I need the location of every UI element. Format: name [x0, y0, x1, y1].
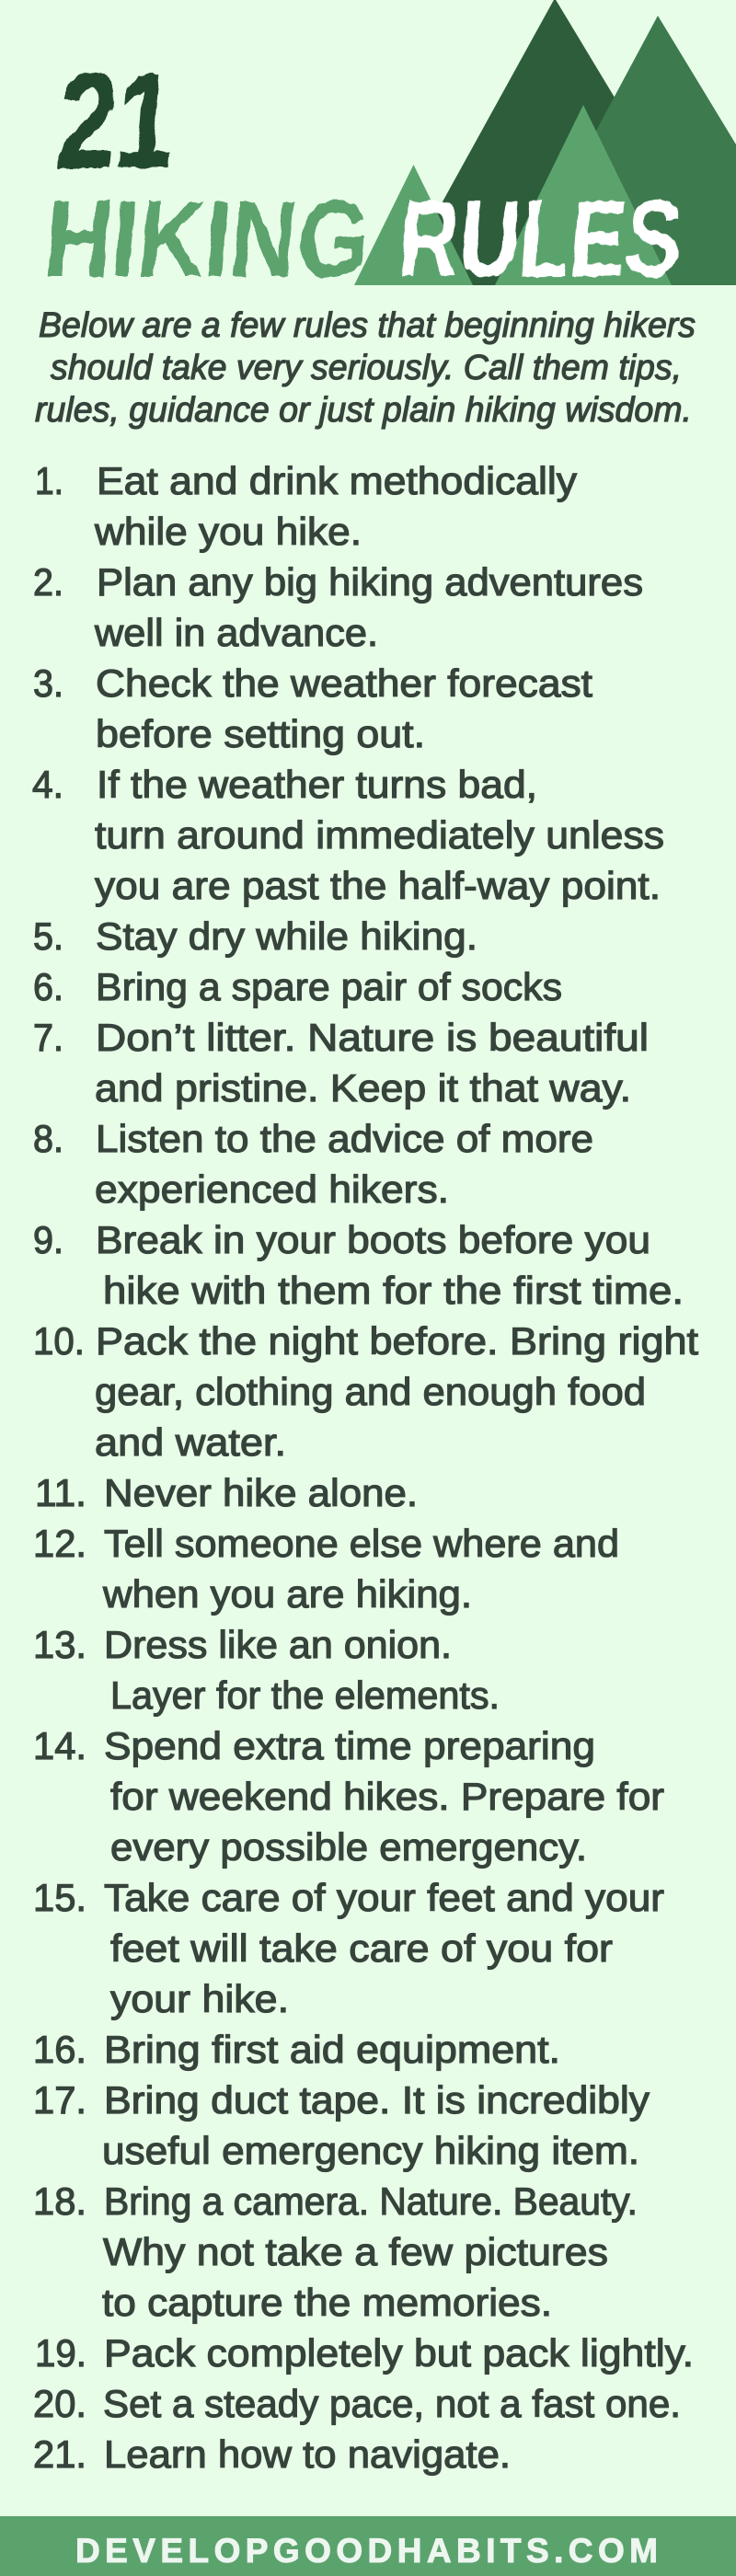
title — [40, 45, 686, 300]
rule 2: Plan any big hiking adventures — [97, 560, 643, 604]
rule 17: 17. — [33, 2078, 86, 2122]
rule 9: Break in your boots before you — [96, 1218, 650, 1261]
intro text: rules, guidance or just plain hiking wisdom. — [35, 391, 692, 430]
rule 13: 13. — [33, 1623, 86, 1666]
rule 6: Bring a spare pair of socks — [96, 965, 562, 1008]
rule 14: 14. — [33, 1724, 86, 1767]
rule 14: Spend extra time preparing — [104, 1724, 595, 1767]
rule 21: 21. — [33, 2432, 86, 2476]
intro text — [35, 306, 696, 430]
rule 7 — [33, 1016, 649, 1110]
rule 4: If the weather turns bad, — [97, 763, 537, 806]
rule 21: Learn how to navigate. — [104, 2432, 511, 2476]
rule 12 — [33, 1522, 619, 1616]
rule 14: every possible emergency. — [110, 1825, 587, 1869]
rule 4 — [32, 763, 664, 907]
rule 8: Listen to the advice of more — [96, 1117, 593, 1160]
rule 18: Bring a camera. Nature. Beauty. — [104, 2179, 638, 2223]
rule 17 — [33, 2078, 650, 2172]
rule 7: 7. — [33, 1016, 63, 1059]
rule 9: hike with them for the first time. — [103, 1269, 684, 1312]
rule 17: Bring duct tape. It is incredibly — [104, 2078, 650, 2122]
rule 3: Check the weather forecast — [96, 661, 592, 705]
rule 3: before setting out. — [96, 712, 425, 755]
rule 15: your hike. — [110, 1977, 289, 2020]
rule 9: 9. — [33, 1218, 63, 1261]
rule 7: Don’t litter. Nature is beautiful — [96, 1016, 649, 1059]
rule 12: when you are hiking. — [102, 1572, 472, 1616]
rule 4: turn around immediately unless — [95, 813, 664, 857]
rule 13: Dress like an onion. — [104, 1623, 452, 1666]
rule 18: 18. — [33, 2179, 86, 2223]
rule 1: while you hike. — [94, 510, 362, 553]
title number: 21: 21 — [52, 45, 181, 195]
rule 9 — [33, 1218, 684, 1312]
rule 3: 3. — [33, 661, 63, 705]
rule 11: Never hike alone. — [104, 1471, 418, 1514]
footer website text: DEVELOPGOODHABITS.COM — [75, 2532, 658, 2570]
rules list — [32, 459, 698, 2476]
rule 2 — [33, 560, 643, 654]
rule 19: 19. — [35, 2331, 86, 2375]
rule 10 — [33, 1319, 698, 1464]
rule 2: 2. — [33, 560, 63, 604]
intro text: should take very seriously. Call them tips, — [51, 349, 682, 387]
rule 11: 11. — [35, 1471, 86, 1514]
rule 16: Bring first aid equipment. — [104, 2028, 560, 2071]
rule 12: 12. — [33, 1522, 86, 1565]
rule 16: 16. — [33, 2028, 86, 2071]
rule 15: 15. — [33, 1876, 86, 1919]
rule 10: 10. — [33, 1319, 85, 1363]
rule 12: Tell someone else where and — [104, 1522, 619, 1565]
rule 18: to capture the memories. — [102, 2281, 552, 2324]
rule 5: Stay dry while hiking. — [96, 914, 477, 958]
title word: HIKING: HIKING — [40, 178, 374, 300]
rule 14 — [33, 1724, 664, 1869]
rule 4: 4. — [32, 763, 63, 806]
intro text: Below are a few rules that beginning hikers — [39, 306, 696, 345]
rule 17: useful emergency hiking item. — [102, 2129, 639, 2172]
rule 18 — [33, 2179, 638, 2324]
rule 15: feet will take care of you for — [110, 1926, 613, 1970]
rule 8: 8. — [33, 1117, 63, 1160]
rule 5: 5. — [33, 914, 63, 958]
rule 7: and pristine. Keep it that way. — [95, 1066, 631, 1110]
rule 13 — [33, 1623, 500, 1717]
rule 20: Set a steady pace, not a fast one. — [103, 2382, 681, 2425]
rule 8 — [33, 1117, 593, 1211]
rule 6: 6. — [33, 965, 63, 1008]
rule 13: Layer for the elements. — [110, 1673, 500, 1717]
icon: mountains — [354, 0, 736, 285]
rule 10: gear, clothing and enough food — [95, 1370, 646, 1413]
rule 18: Why not take a few pictures — [103, 2230, 608, 2273]
rule 10: Pack the night before. Bring right — [96, 1319, 698, 1363]
rule 15 — [33, 1876, 664, 2020]
rule 14: for weekend hikes. Prepare for — [110, 1775, 664, 1818]
footer — [0, 2516, 736, 2576]
rule 3 — [33, 661, 592, 755]
rule 1 — [35, 459, 577, 553]
rule 4: you are past the half-way point. — [95, 864, 661, 907]
rule 19: Pack completely but pack lightly. — [104, 2331, 694, 2375]
rule 1: Eat and drink methodically — [97, 459, 577, 502]
rule 15: Take care of your feet and your — [104, 1876, 664, 1919]
rule 8: experienced hikers. — [95, 1167, 449, 1211]
rule 20: 20. — [33, 2382, 86, 2425]
rule 10: and water. — [95, 1420, 286, 1464]
rule 2: well in advance. — [94, 611, 378, 654]
rule 1: 1. — [35, 459, 63, 502]
